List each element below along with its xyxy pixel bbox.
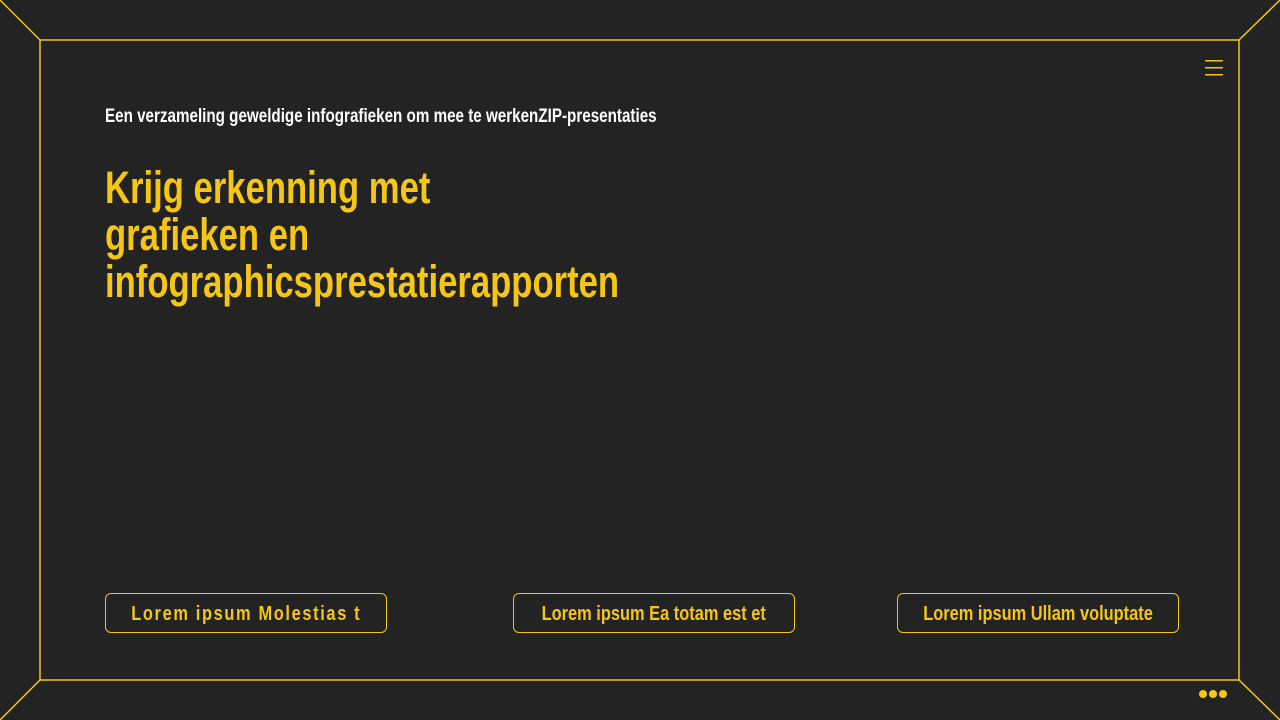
title: grafieken en — [105, 209, 309, 260]
button 3: Lorem ipsum Ullam voluptate — [923, 602, 1153, 624]
icon: dots — [1199, 690, 1227, 698]
title: infographicsprestatierapporten — [105, 256, 619, 307]
button 1: Lorem ipsum Molestias t — [131, 602, 361, 624]
button 2: Lorem ipsum Ea totam est et — [542, 602, 766, 624]
subtitle: Een verzameling geweldige infografieken om mee te werkenZIP-presentaties — [105, 106, 657, 127]
title — [105, 162, 619, 307]
icon: menu — [1205, 60, 1223, 76]
button 1 — [105, 593, 387, 633]
button 2 — [513, 593, 795, 633]
button 3 — [897, 593, 1179, 633]
title: Krijg erkenning met — [105, 162, 430, 213]
